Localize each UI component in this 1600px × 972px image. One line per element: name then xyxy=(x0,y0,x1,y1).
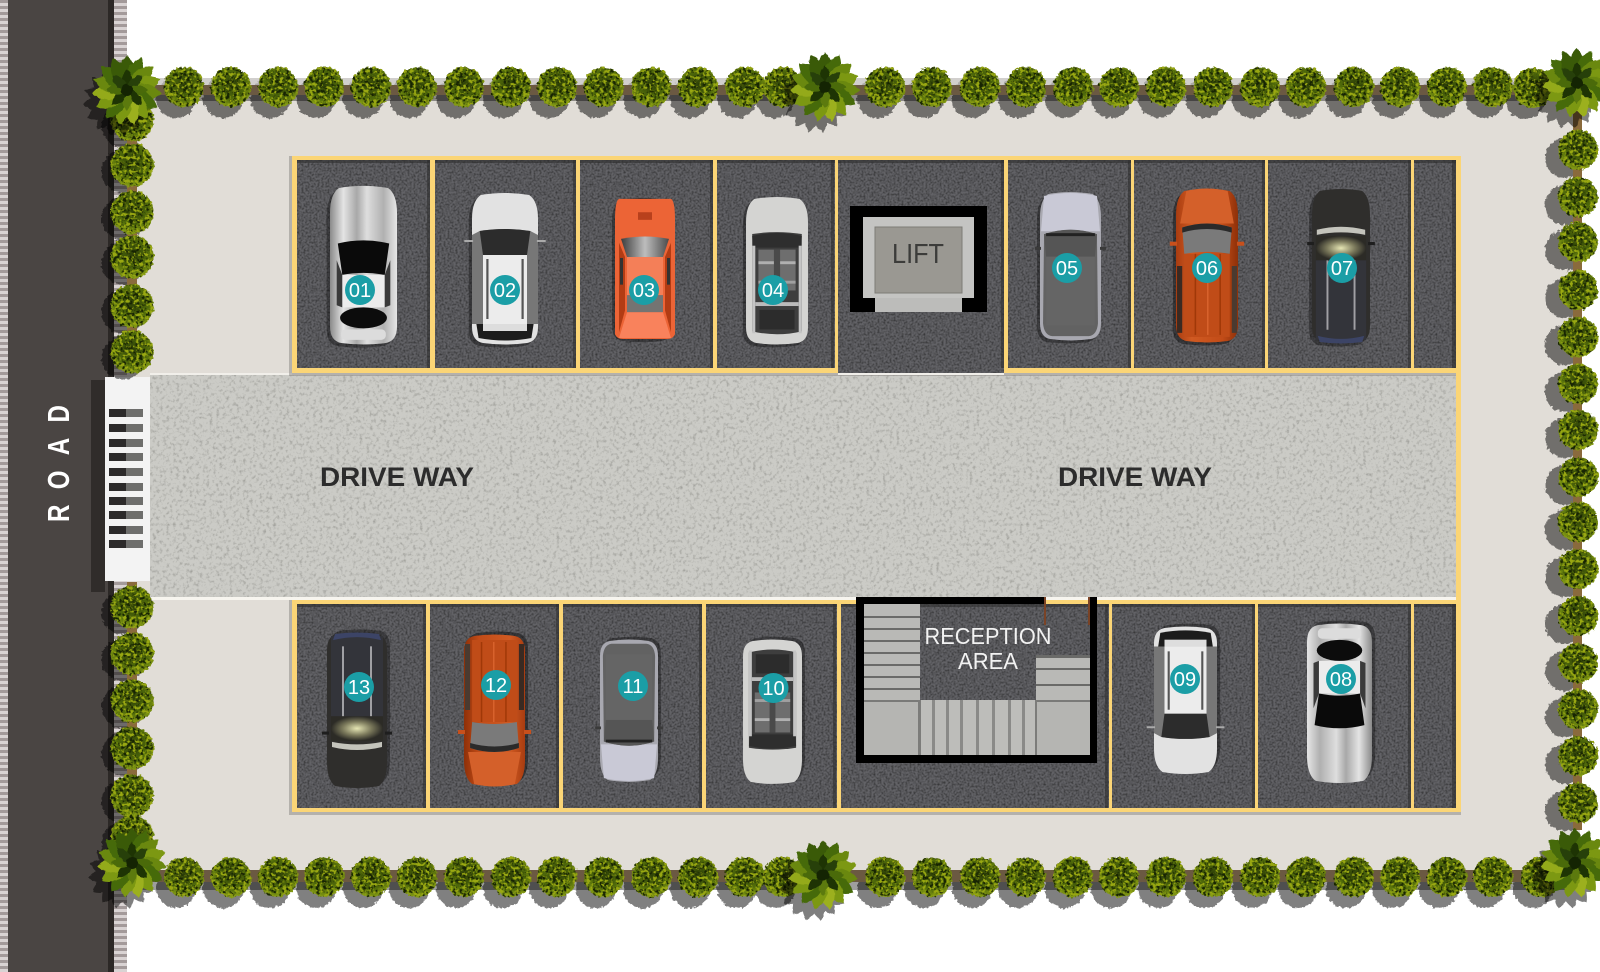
car 05: 05 xyxy=(1056,258,1078,280)
car 13 xyxy=(322,629,392,788)
car 01: 01 xyxy=(349,280,371,302)
car 07: 07 xyxy=(1331,258,1353,280)
ground: paved beige site xyxy=(126,95,1580,872)
car 12: 12 xyxy=(485,675,507,697)
palm: top left xyxy=(91,55,163,126)
lift xyxy=(850,206,987,312)
car 09 xyxy=(1147,624,1224,774)
palm: top right xyxy=(1541,48,1600,119)
parking row: bottom xyxy=(289,600,1461,815)
car 06: 06 xyxy=(1196,258,1218,280)
car 10 xyxy=(743,637,805,784)
landing and front steps xyxy=(864,700,1090,755)
car 09: 09 xyxy=(1174,669,1196,691)
car 08: 08 xyxy=(1330,669,1352,691)
area label: AREA xyxy=(958,648,1019,674)
driveway xyxy=(150,373,1456,600)
parking row: top xyxy=(289,156,1461,601)
car 12 xyxy=(458,632,531,786)
car 03 xyxy=(612,198,675,342)
palm: bottom middle xyxy=(787,840,859,911)
hedge: top side xyxy=(126,67,1576,119)
car 05 xyxy=(1035,192,1106,343)
palm: bottom left xyxy=(96,828,168,899)
entrance gate with stripes xyxy=(91,377,150,592)
car 02: 02 xyxy=(494,280,516,302)
stairs left xyxy=(864,604,920,700)
car 04: 04 xyxy=(762,280,784,302)
car 08 xyxy=(1307,620,1375,783)
road label: ROAD xyxy=(41,405,76,522)
car 11 xyxy=(595,637,663,782)
palm: top middle xyxy=(789,52,861,123)
lift label: LIFT xyxy=(892,238,944,269)
car 06 xyxy=(1170,189,1244,346)
car 07 xyxy=(1307,189,1375,347)
car 04 xyxy=(743,197,808,347)
palm: bottom right xyxy=(1539,828,1600,899)
hedge: bottom side xyxy=(126,857,1576,908)
car 10: 10 xyxy=(762,678,785,700)
driveway label left: DRIVE WAY xyxy=(320,462,474,492)
driveway label right: DRIVE WAY xyxy=(1058,462,1212,492)
road xyxy=(0,0,127,972)
hedge: right side xyxy=(1545,100,1598,831)
car 03: 03 xyxy=(633,280,655,302)
car 13: 13 xyxy=(348,677,370,699)
car 11: 11 xyxy=(623,676,643,698)
car 02 xyxy=(464,193,546,348)
reception label: RECEPTION xyxy=(924,623,1052,649)
reception area xyxy=(856,597,1097,763)
hedge: left side xyxy=(101,98,154,865)
car 01 xyxy=(327,186,397,348)
stairs right xyxy=(1036,655,1090,700)
